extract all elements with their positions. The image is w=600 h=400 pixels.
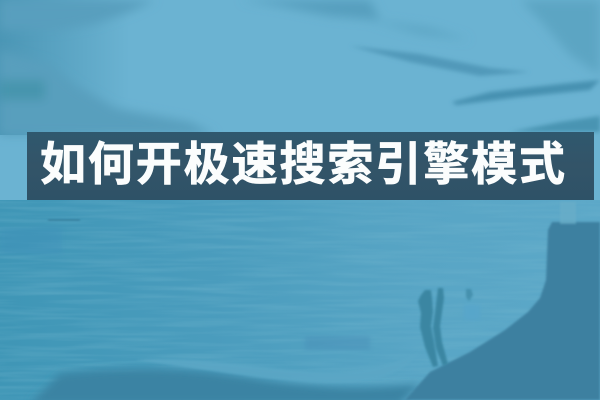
rocky headland [405, 222, 600, 400]
two figures on the shore [418, 288, 473, 367]
foreground wave [30, 369, 420, 400]
title banner [27, 132, 594, 200]
title: 如何开极速搜索引擎模式 [40, 138, 567, 190]
sea [0, 200, 600, 400]
white glow at headland top [560, 202, 576, 224]
sky [0, 0, 600, 205]
